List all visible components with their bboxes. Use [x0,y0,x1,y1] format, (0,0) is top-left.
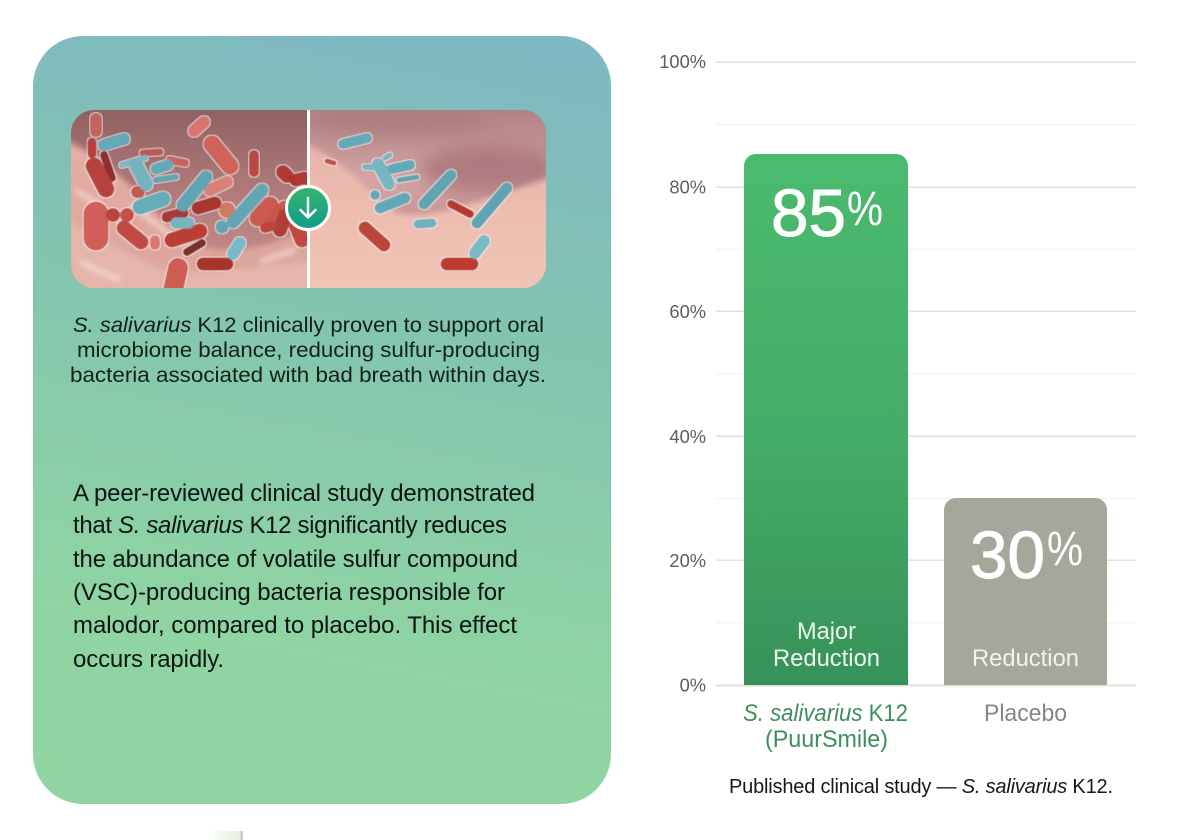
bar: S. salivarius K12 85% [744,154,908,685]
image: before and after bacteria comparison [71,110,546,288]
y axis labels: 80% [669,176,706,198]
x axis label: S. salivarius K12 (PuurSmile): S. salivarius K12 [743,700,908,727]
text block: clinical study paragraph: the abundance of volatile sulfur compound [73,546,518,573]
text block: image caption: S. salivarius K12 clinically proven to support oral [73,314,544,337]
y axis labels: 0% [680,674,706,696]
bar: S. salivarius K12 85%: 85 [771,176,846,251]
after side: mostly blue bacteria [310,110,546,288]
text block: clinical study paragraph: (VSC)-producing bacteria responsible for [73,579,505,606]
x axis label: S. salivarius K12 (PuurSmile) [743,700,908,753]
text block: clinical study paragraph: A peer-reviewed clinical study demonstrated [73,480,535,507]
bar: placebo 30% [944,498,1107,685]
text block: clinical study paragraph [73,480,535,673]
bar: placebo 30%: Reduction [972,645,1079,672]
bar: placebo 30%: 30 [970,518,1045,593]
text block: clinical study paragraph: malodor, compared to placebo. This effect [73,612,517,639]
panel: gradient text card [33,36,611,804]
text block: clinical study paragraph: that S. salivarius K12 significantly reduces [73,512,507,539]
text block: clinical study paragraph: occurs rapidly. [73,646,224,673]
bar: S. salivarius K12 85%: Reduction [773,645,880,672]
chart source note: Published clinical study — S. salivarius K12. [729,776,1113,798]
y axis labels: 20% [669,550,706,571]
before side: mixed red and blue bacteria [71,110,307,288]
y axis labels [659,51,706,696]
icon: down arrow badge [286,186,330,230]
bar: S. salivarius K12 85%: Major [797,618,856,645]
bar chart: reduction in VSC-producing bacteria [659,51,1136,798]
bar: placebo 30%: % [1047,523,1083,576]
y axis labels: 100% [659,51,706,72]
text block: image caption [70,314,546,387]
bar: S. salivarius K12 85%: % [847,183,883,236]
x axis label: placebo: Placebo [984,700,1067,727]
y axis labels: 40% [669,426,706,447]
x axis label: S. salivarius K12 (PuurSmile): (PuurSmile) [765,726,888,753]
divider line [307,110,310,288]
text block: image caption: bacteria associated with bad breath within days. [70,364,546,387]
y axis labels: 60% [669,301,706,322]
text block: image caption: microbiome balance, reducing sulfur-producing [77,339,540,362]
